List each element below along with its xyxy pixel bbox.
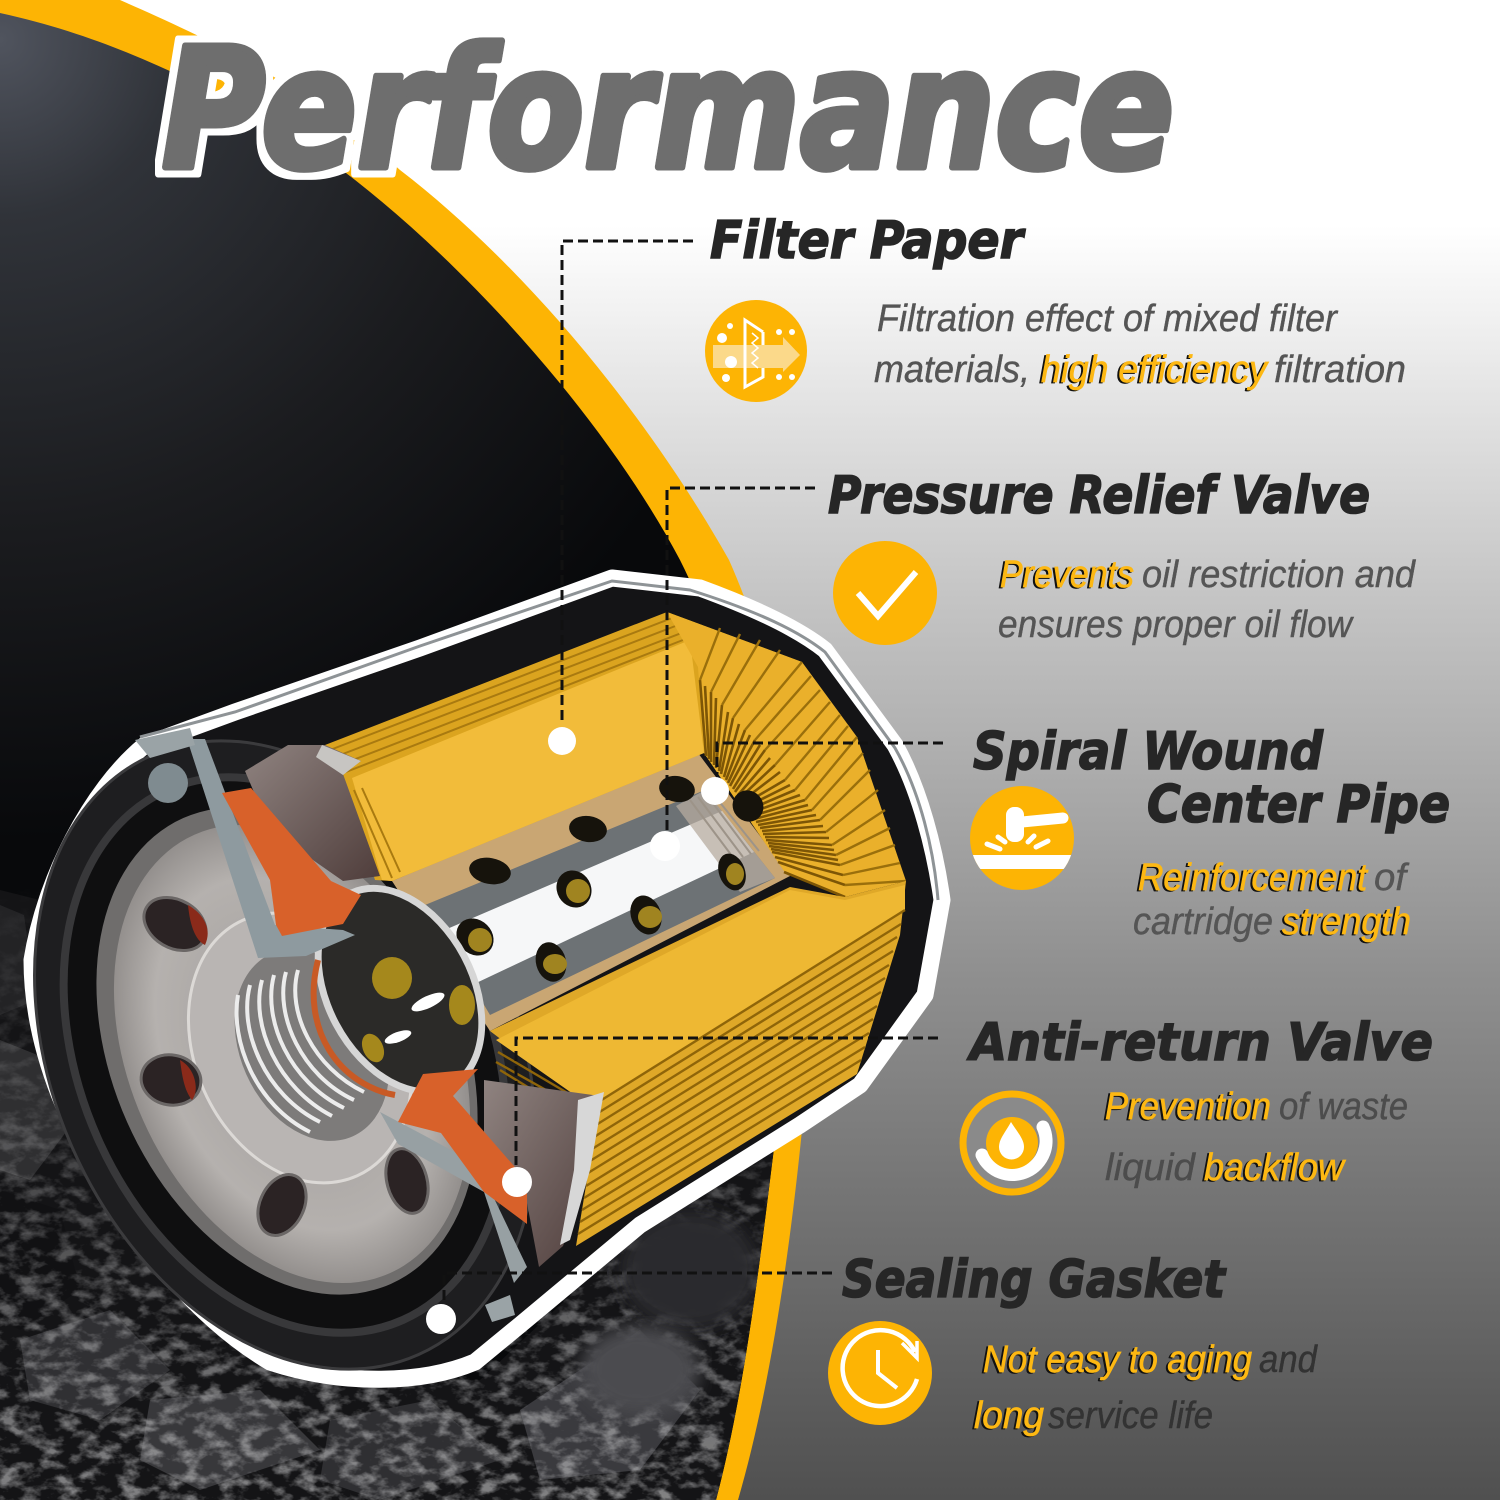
silver base plate <box>23 747 551 1355</box>
panel: filter paper <box>705 211 1406 402</box>
text: sealing gasket description: Not easy to aging <box>983 1339 1252 1381</box>
base ring <box>0 661 630 1449</box>
icon: oil drop ring <box>963 1094 1061 1192</box>
text: anti-return valve description: of waste <box>1279 1086 1408 1128</box>
text: anti-return valve description: liquid <box>1105 1147 1197 1189</box>
heading: pressure relief valve: Pressure Relief Valve <box>828 466 1370 526</box>
callout: anti-return valve leader <box>502 1038 938 1197</box>
icon: hammer <box>965 786 1080 890</box>
text: anti-return valve description: Prevention <box>1105 1086 1271 1128</box>
callout: filter paper leader <box>548 241 693 755</box>
tan inner wrap around pipe <box>392 753 790 1031</box>
lower end cap <box>380 1069 604 1322</box>
filter shell with white outline <box>32 578 942 1379</box>
dark backdrop panel <box>0 13 782 1500</box>
bolt holes <box>134 887 435 1243</box>
text: filter paper description: high efficiency <box>1041 349 1269 391</box>
heading: anti-return valve: Anti-return Valve <box>966 1013 1433 1073</box>
panel: sealing gasket <box>828 1250 1319 1437</box>
text: pressure relief valve description: Prevents <box>1000 554 1134 596</box>
center pipe <box>425 773 775 1015</box>
title: Performance <box>162 14 1174 207</box>
text: center pipe description: strength <box>1282 901 1411 943</box>
yellow curved band <box>0 0 812 1500</box>
upper filter paper block <box>325 612 845 897</box>
text: sealing gasket description: long <box>974 1395 1044 1437</box>
upper end cap <box>135 728 380 958</box>
text: anti-return valve description <box>1105 1086 1408 1189</box>
text: pressure relief valve description: ensures proper oil flow <box>998 604 1354 646</box>
icon: clock <box>828 1321 932 1425</box>
callout: sealing gasket leader <box>426 1273 832 1334</box>
heading: filter paper: Filter Paper <box>710 211 1026 271</box>
text: pressure relief valve description: oil restriction and <box>1142 554 1417 596</box>
text: filter paper description: filtration <box>1274 349 1406 391</box>
lower filter paper block <box>490 881 906 1246</box>
hub <box>147 877 453 1219</box>
callout: center pipe leader <box>701 743 943 805</box>
oil filter cutaway <box>0 578 942 1449</box>
text: sealing gasket description: service life <box>1048 1395 1213 1437</box>
heading: spiral wound center pipe <box>973 722 1450 835</box>
text: sealing gasket description <box>974 1339 1319 1437</box>
thread <box>237 970 364 1132</box>
callout: pressure relief valve leader <box>650 488 815 861</box>
tube opening <box>280 855 520 1125</box>
icon: check mark <box>833 541 937 645</box>
text: filter paper description: Filtration effect of mixed filter <box>877 298 1338 340</box>
panel: anti-return valve <box>963 1013 1433 1192</box>
heading: sealing gasket: Sealing Gasket <box>842 1250 1227 1310</box>
panel: pressure relief valve <box>828 466 1417 646</box>
heading: spiral wound center pipe: Spiral Wound <box>973 722 1324 782</box>
text: sealing gasket description: and <box>1259 1339 1319 1381</box>
heading: spiral wound center pipe: Center Pipe <box>1147 775 1450 835</box>
text: filter paper description <box>874 298 1406 391</box>
shell top steel edge <box>140 581 938 900</box>
text: center pipe description: Reinforcement <box>1138 857 1368 899</box>
text: anti-return valve description: backflow <box>1204 1147 1346 1189</box>
text: center pipe description <box>1133 857 1411 943</box>
text: pressure relief valve description <box>998 554 1417 646</box>
text: center pipe description: of <box>1374 857 1409 899</box>
text: center pipe description: cartridge <box>1133 901 1273 943</box>
coal pile <box>0 880 820 1500</box>
pipe holes <box>449 773 770 985</box>
icon: filtration <box>705 300 807 402</box>
text: filter paper description: materials, <box>874 349 1030 391</box>
panel: spiral wound center pipe <box>965 722 1450 943</box>
right fan pleats <box>667 612 906 897</box>
